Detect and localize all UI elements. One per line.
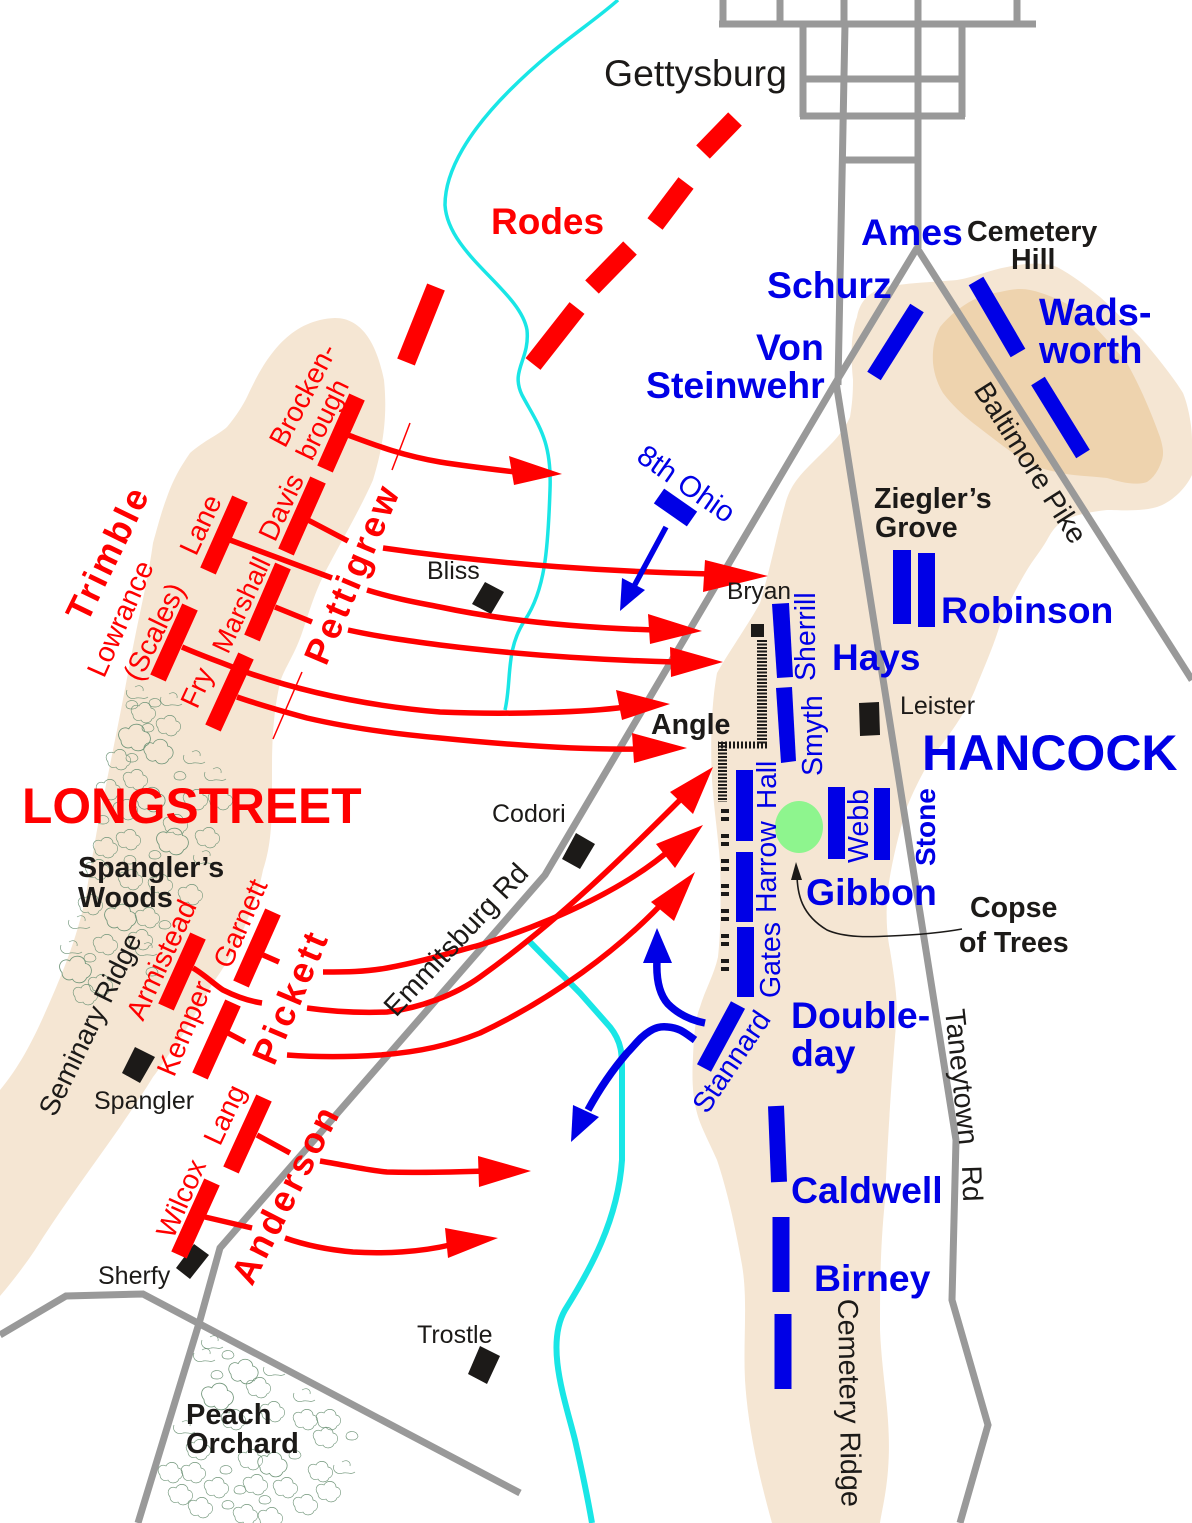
label: Grove: Grove	[875, 512, 958, 544]
hill: darker summit of Cemetery Hill	[933, 289, 1163, 484]
label: Spangler's: Spangler’s	[78, 852, 224, 884]
Union: brigade bars	[736, 550, 935, 997]
label: Wilcox: Wilcox	[150, 1155, 212, 1242]
building: Bryan barn	[751, 624, 764, 637]
label: Armistead: Armistead	[120, 895, 204, 1025]
label: Trostle: Trostle	[417, 1321, 492, 1349]
label: Angle: Angle	[651, 709, 730, 741]
building: Leister	[859, 702, 880, 736]
label: (Scales): (Scales)	[118, 578, 192, 686]
label: Lowrance: Lowrance	[81, 556, 161, 682]
label: Anderson: Anderson	[223, 1097, 348, 1291]
Pettigrew division line	[273, 423, 410, 739]
label: Robinson: Robinson	[941, 589, 1113, 631]
arrowheads	[445, 456, 768, 1258]
label: Rd: Rd	[956, 1165, 988, 1202]
label: worth: worth	[1038, 330, 1142, 372]
label: Stone: Stone	[910, 788, 941, 866]
label: Hill: Hill	[1011, 244, 1055, 276]
road: Taneytown Road	[836, 382, 988, 1523]
label: Lang: Lang	[197, 1080, 252, 1150]
label: Harrow: Harrow	[751, 821, 783, 913]
label: Marshall: Marshall	[206, 552, 277, 658]
label: Codori: Codori	[492, 800, 566, 828]
building: Sherfy	[176, 1244, 209, 1279]
label: Rodes: Rodes	[491, 201, 604, 242]
Confederate: Rodes division	[406, 119, 735, 364]
label: Sherrill: Sherrill	[790, 592, 822, 681]
label: Gates: Gates	[755, 922, 787, 998]
label: Double-day: Double-	[791, 994, 930, 1036]
label: Pettigrew: Pettigrew	[296, 477, 409, 670]
label: HANCOCK: HANCOCK	[922, 725, 1178, 781]
label: Leister: Leister	[900, 692, 975, 720]
ridge: Seminary Ridge	[0, 318, 385, 1296]
woods: Peach Orchard trees	[158, 1336, 358, 1523]
label: Sherfy: Sherfy	[98, 1262, 171, 1290]
label: Webb: Webb	[843, 789, 875, 863]
label: Ames: Ames	[861, 211, 963, 253]
label: 8th Ohio: 8th Ohio	[631, 439, 741, 530]
label: brough: brough	[290, 374, 355, 465]
Confederate labels	[22, 201, 604, 1291]
road: Millerstown Road	[0, 1294, 520, 1493]
label: Bliss: Bliss	[427, 557, 480, 585]
arrow: 8th Ohio	[632, 527, 666, 590]
label: Ziegler's Grove: Ziegler’s	[874, 483, 992, 515]
ridge: Cemetery Ridge and Cemetery Hill	[692, 264, 1192, 1523]
building: Codori	[562, 833, 595, 869]
label: Hays: Hays	[832, 637, 920, 678]
label: Copse: Copse	[970, 892, 1057, 924]
label: Taneytown Rd: Taneytown	[938, 1007, 984, 1146]
label: of Trees: of Trees	[959, 927, 1069, 959]
road: Baltimore Pike	[917, 248, 1192, 680]
label: Emmitsburg Rd: Emmitsburg Rd	[378, 857, 535, 1023]
label: Hall: Hall	[751, 761, 782, 809]
label: Birney: Birney	[814, 1257, 931, 1299]
label: Spangler: Spangler	[94, 1087, 194, 1115]
label: Kemper: Kemper	[151, 976, 220, 1081]
creek: Plum Run lower	[528, 940, 622, 1523]
arrow: Stannard flank left	[657, 960, 705, 1023]
road grid: town of Gettysburg	[719, 0, 1036, 385]
stone wall at the Angle	[718, 640, 767, 976]
label: Cemetery Hill: Cemetery	[967, 216, 1097, 248]
label: Seminary Ridge: Seminary Ridge	[33, 928, 148, 1121]
woods: Spangler's Woods	[60, 686, 233, 1005]
Union labels	[631, 211, 1178, 1299]
Confederate: brigade bars	[158, 397, 357, 1255]
label: Garnett: Garnett	[207, 874, 274, 972]
Confederate attack arrows	[182, 435, 710, 1253]
label: LONGSTREET: LONGSTREET	[22, 778, 362, 834]
label: Orchard: Orchard	[186, 1428, 299, 1460]
label: Von: Von	[756, 326, 824, 368]
label: Fry: Fry	[174, 663, 220, 713]
label: Baltimore Pike: Baltimore Pike	[967, 377, 1093, 549]
label: Steinwehr: Steinwehr	[646, 364, 825, 406]
label: Lane: Lane	[173, 490, 228, 560]
label: Davis: Davis	[252, 469, 310, 546]
label: Peach: Peach	[186, 1399, 271, 1431]
creek: Stevens Run upper	[445, 0, 618, 710]
label: Bryan: Bryan	[727, 578, 791, 605]
label: Pickett: Pickett	[244, 923, 337, 1070]
building: Trostle	[468, 1346, 500, 1384]
label: Schurz: Schurz	[767, 264, 892, 306]
label: Gettysburg: Gettysburg	[604, 52, 787, 94]
label: Caldwell: Caldwell	[791, 1169, 943, 1211]
building: Spangler	[122, 1047, 155, 1083]
arrow: Stannard flank right	[588, 1027, 695, 1110]
arrow: Copse of Trees pointer	[797, 873, 962, 937]
label: Trimble: Trimble	[57, 479, 158, 628]
label: Woods: Woods	[78, 882, 173, 914]
label: Smyth: Smyth	[797, 695, 829, 776]
copse of trees	[775, 801, 823, 853]
label: Stannard: Stannard	[686, 1005, 777, 1119]
road: Emmitsburg Road	[138, 248, 917, 1523]
label: Gibbon: Gibbon	[806, 871, 937, 913]
label: Brocken-brough: Brocken-	[263, 338, 343, 452]
label: Wads-worth: Wads-	[1039, 292, 1152, 334]
label: Cemetery Ridge: Cemetery Ridge	[831, 1299, 867, 1507]
building: Bliss	[472, 582, 504, 614]
label: day: day	[791, 1032, 856, 1074]
